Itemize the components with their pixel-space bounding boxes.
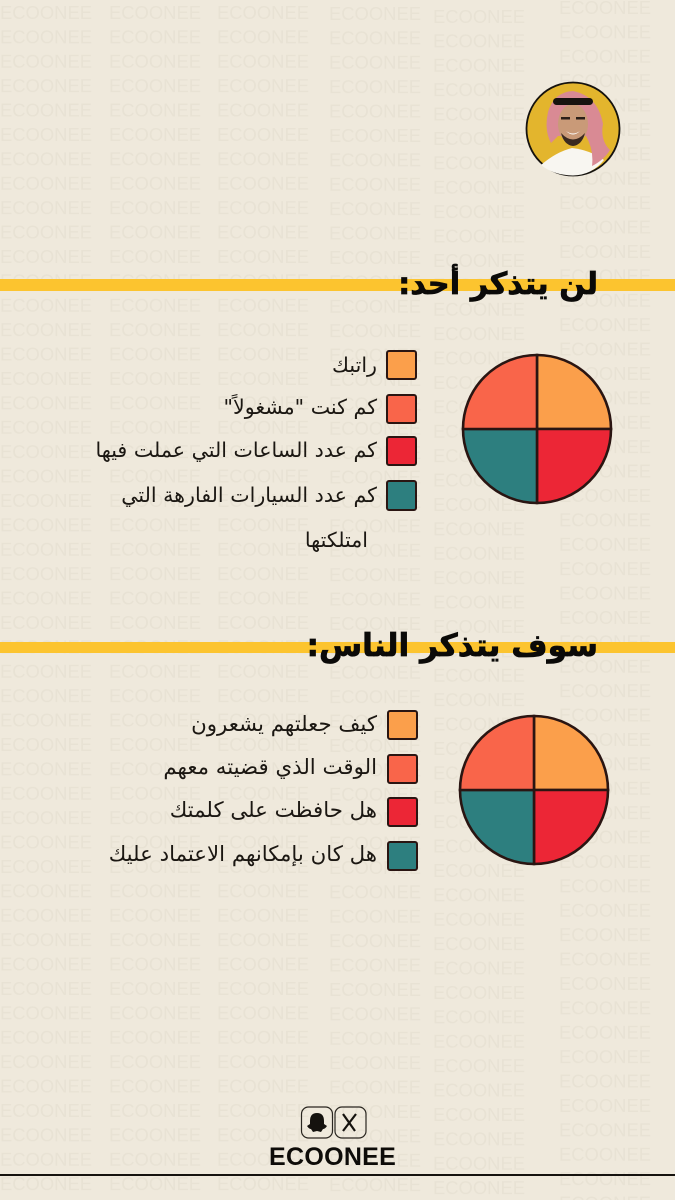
legend 2 <box>109 711 417 870</box>
heading 2: سوف يتذكر الناس: <box>306 628 598 664</box>
swatch: busy <box>387 395 416 423</box>
swatch: cars <box>387 481 416 510</box>
label: cars line 2: امتلكتها <box>305 528 368 552</box>
pie chart 1 <box>463 355 611 503</box>
heading 1: لن يتذكر أحد: <box>398 264 598 302</box>
label: busy: كم كنت "مشغولاً" <box>223 394 377 419</box>
label: cars line 1: كم عدد السيارات الفارهة التي <box>121 483 377 507</box>
label: reliable: هل كان بإمكانهم الاعتماد عليك <box>109 842 377 867</box>
avatar portrait <box>526 82 620 176</box>
swatch: feelings <box>388 711 417 739</box>
section bar 1 <box>0 279 675 291</box>
swatch: hours <box>387 437 416 465</box>
pie chart 2 <box>460 716 608 864</box>
label: feelings: كيف جعلتهم يشعرون <box>191 712 378 737</box>
swatch: salary <box>387 351 416 379</box>
brand name: ECOONEE <box>269 1143 396 1171</box>
label: salary: راتبك <box>332 353 377 377</box>
label: word: هل حافظت على كلمتك <box>170 798 377 823</box>
swatch: reliable <box>388 842 417 870</box>
swatch: word <box>388 798 417 826</box>
swatch: time <box>388 755 417 783</box>
icon: X <box>335 1107 366 1138</box>
label: time: الوقت الذي قضيته معهم <box>163 755 377 780</box>
legend 1 <box>95 351 416 552</box>
footer rule <box>0 1174 675 1176</box>
label: hours: كم عدد الساعات التي عملت فيها <box>95 438 377 462</box>
icon: snapchat <box>302 1107 332 1138</box>
section bar 2 <box>0 642 675 653</box>
